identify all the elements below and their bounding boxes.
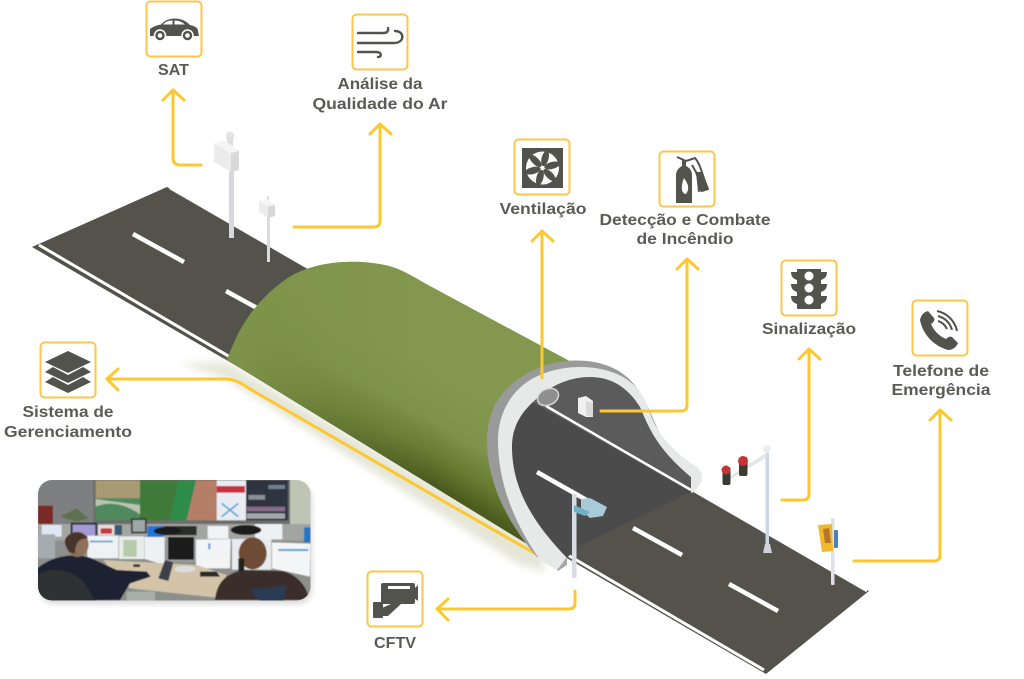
connector: CCTV — [437, 591, 575, 620]
tunnel portal — [487, 361, 702, 571]
connector: fire detection — [601, 259, 698, 411]
label: CCTV: CFTV — [374, 635, 417, 652]
front row monitors — [37, 534, 55, 558]
icon: phone — [912, 300, 968, 356]
connector: SAT — [163, 90, 201, 165]
label: SAT: SAT — [158, 62, 190, 79]
icon: wind — [352, 14, 408, 70]
icon: car — [146, 2, 202, 56]
label: air quality — [312, 76, 448, 113]
lane dashes — [133, 234, 778, 611]
connector: emergency phone — [854, 410, 951, 561]
label: fire detection: Detecção e Combate — [600, 212, 771, 229]
connector: ventilation — [532, 231, 553, 378]
video wall — [93, 479, 290, 524]
label: management system — [4, 404, 132, 441]
back row monitors — [37, 524, 313, 541]
road — [32, 187, 869, 674]
label: management system: Sistema de — [22, 404, 114, 421]
desk — [103, 560, 227, 598]
icon: CCTV camera — [368, 572, 422, 626]
tunnel inner road — [512, 402, 691, 558]
tunnel inner wall — [533, 377, 691, 494]
icon: fire extinguisher — [660, 152, 714, 206]
device: jet fan — [535, 385, 561, 409]
icon: layers — [40, 342, 96, 398]
device: traffic lights — [722, 445, 772, 553]
label: air quality: Análise da — [338, 76, 423, 93]
label: signalling: Sinalização — [762, 321, 856, 338]
operator right — [215, 570, 309, 600]
operator left — [37, 556, 151, 601]
label: emergency phone: Telefone de — [893, 363, 989, 380]
connector line to management system — [107, 379, 536, 554]
label: fire detection — [600, 212, 771, 248]
tunnel body — [227, 262, 590, 552]
tunnel shadow — [180, 362, 545, 572]
device: air quality pole — [259, 196, 275, 262]
icon: traffic light — [782, 260, 836, 316]
device: CCTV camera — [572, 494, 607, 578]
arrow head: management system — [107, 369, 118, 390]
connector: signalling — [782, 349, 820, 500]
device: SAT pole — [214, 132, 239, 238]
device: emergency phone — [818, 518, 838, 585]
label: air quality: Qualidade do Ar — [312, 96, 448, 113]
label: emergency phone — [892, 363, 991, 399]
label: management system: Gerenciamento — [4, 424, 132, 441]
icon: fan — [514, 140, 570, 194]
label: emergency phone: Emergência — [892, 382, 991, 399]
control room photo — [37, 478, 313, 604]
label: ventilation: Ventilação — [500, 201, 586, 218]
label: fire detection: de Incêndio — [636, 231, 734, 248]
device: fire detector box — [578, 396, 593, 417]
connector: air quality — [294, 124, 391, 227]
